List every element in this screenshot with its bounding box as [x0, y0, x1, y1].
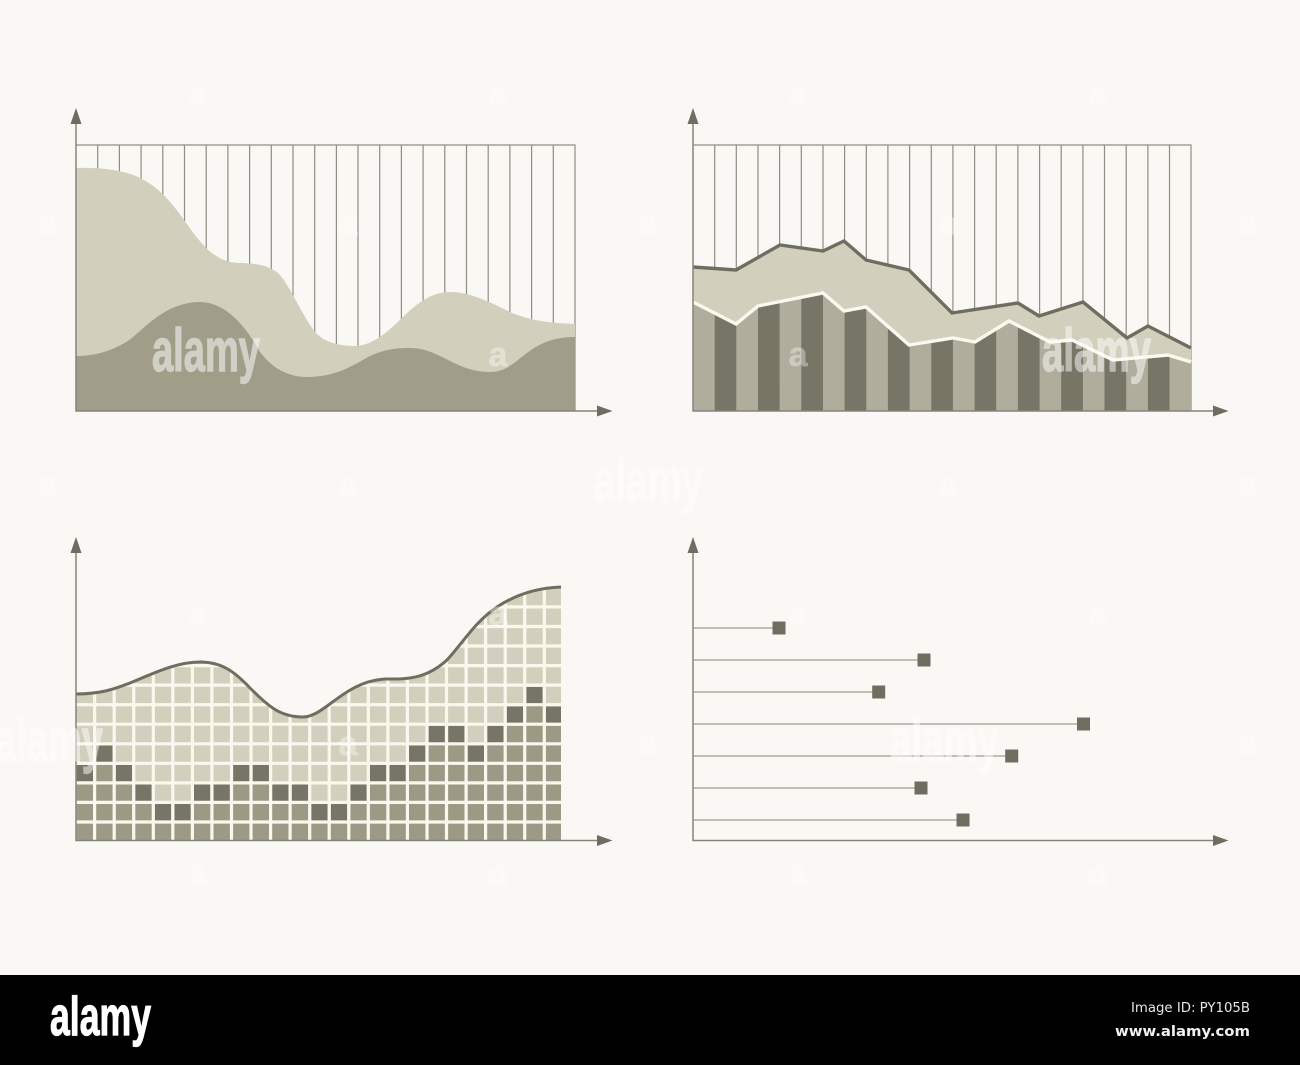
striped bars	[694, 294, 1191, 410]
tile grid lines	[76, 580, 562, 840]
watermarks: a	[939, 205, 959, 243]
panel: tile grid area chart	[70, 537, 612, 846]
white line	[693, 293, 1191, 362]
watermarks: a	[1239, 205, 1259, 243]
arrow: vertical axis	[688, 108, 698, 124]
light area	[76, 168, 575, 411]
watermarks: a	[789, 75, 809, 113]
panel: striped bars with line areas	[688, 108, 1228, 416]
footer logo: alamy	[50, 985, 151, 1047]
axes	[76, 550, 600, 840]
curve line	[76, 587, 561, 717]
arrow: horizontal axis	[1213, 406, 1228, 416]
watermarks: a	[789, 595, 809, 633]
watermarks: a	[639, 205, 659, 243]
horizontal stems	[693, 628, 1083, 820]
watermarks: a	[339, 725, 359, 763]
watermarks: a	[189, 75, 209, 113]
watermarks: a	[1239, 725, 1259, 763]
watermarks: a	[39, 205, 59, 243]
watermarks: alamy	[594, 447, 703, 514]
watermarks: a	[339, 205, 359, 243]
watermarks: a	[1089, 595, 1109, 633]
watermarks: a	[189, 855, 209, 893]
grid frame with vertical lines	[76, 145, 575, 411]
arrow: horizontal axis	[597, 835, 612, 846]
watermarks: a	[1089, 855, 1109, 893]
axes	[76, 120, 600, 411]
watermarks: a	[639, 725, 659, 763]
panel: lollipop chart	[688, 537, 1228, 846]
axes	[693, 120, 1216, 411]
watermarks: a	[489, 595, 509, 633]
beige area under dark line	[693, 241, 1191, 411]
grid frame with vertical lines	[693, 145, 1191, 411]
panel: smooth area chart	[70, 108, 612, 416]
watermarks: a	[789, 855, 809, 893]
watermarks	[0, 75, 1259, 893]
arrow: horizontal axis	[597, 406, 612, 416]
watermarks: a	[1089, 75, 1109, 113]
watermarks: alamy	[0, 707, 103, 774]
dark line	[693, 241, 1191, 348]
watermarks: a	[189, 595, 209, 633]
image id: Image ID: PY105B	[1131, 1000, 1250, 1016]
watermarks: alamy	[152, 317, 260, 384]
arrow: vertical axis	[688, 537, 698, 553]
mid-tone columns	[77, 706, 561, 840]
arrow: horizontal axis	[1213, 835, 1228, 846]
square markers	[772, 622, 1090, 826]
arrow: vertical axis	[70, 537, 82, 553]
watermarks: a	[1239, 465, 1259, 503]
website: www.alamy.com	[1115, 1024, 1250, 1040]
light area	[76, 587, 561, 840]
dark area	[76, 302, 575, 411]
watermarks: a	[489, 855, 509, 893]
watermarks: a	[339, 465, 359, 503]
dark tiles	[77, 687, 561, 820]
footer bar	[0, 975, 1300, 1065]
watermarks: a	[39, 465, 59, 503]
watermarks: a	[939, 465, 959, 503]
watermarks: a	[489, 336, 509, 374]
watermarks: a	[489, 75, 509, 113]
arrow: vertical axis	[70, 108, 82, 124]
axes	[693, 550, 1216, 840]
watermarks: a	[789, 336, 809, 374]
watermarks: alamy	[1042, 317, 1151, 384]
watermarks: alamy	[890, 707, 999, 774]
